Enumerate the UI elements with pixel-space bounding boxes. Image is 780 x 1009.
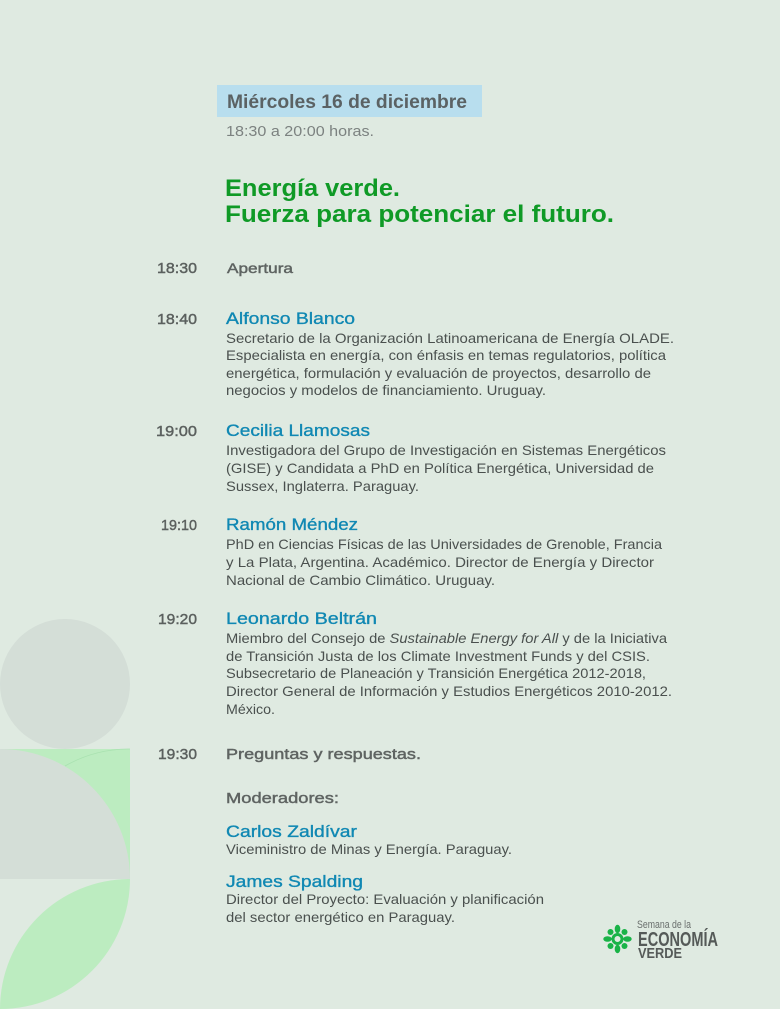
logo: Semana de la Economía Verde: Semana de la	[637, 919, 692, 931]
date banner: Miércoles 16 de diciembre	[227, 92, 467, 113]
item: preguntas y respuestas	[158, 746, 421, 763]
logo: Semana de la Economía Verde: VERDE	[638, 945, 682, 962]
speaker: Alfonso Blanco: negocios y modelos de financiamiento. Uruguay.	[226, 382, 546, 398]
speaker: Alfonso Blanco: Especialista en energía, con énfasis en temas regulatorios, política	[226, 347, 666, 363]
title: Fuerza para potenciar el futuro.	[225, 201, 614, 228]
speaker: Leonardo Beltrán: Subsecretario de Planeación y Transición Energética 2012-2018,	[226, 665, 646, 681]
heading: moderadores: Moderadores:	[226, 790, 339, 807]
speaker: Cecilia Llamosas: (GISE) y Candidata a PhD en Política Energética, Universidad de	[226, 460, 654, 476]
speaker: Leonardo Beltrán: de Transición Justa de los Climate Investment Funds y del CSIS.	[226, 648, 650, 664]
speaker: Ramón Méndez	[161, 515, 662, 588]
speaker: Alfonso Blanco: Secretario de la Organización Latinoamericana de Energía OLADE.	[226, 330, 674, 346]
speaker: Cecilia Llamosas: Sussex, Inglaterra. Paraguay.	[226, 478, 419, 494]
title	[225, 175, 614, 228]
speaker: Cecilia Llamosas: 19:00	[156, 423, 197, 440]
speaker: Cecilia Llamosas: Investigadora del Grupo de Investigación en Sistemas Energéticos	[226, 442, 666, 458]
speaker: Leonardo Beltrán: Leonardo Beltrán	[226, 609, 377, 628]
moderator: James Spalding: Director del Proyecto: Evaluación y planificación	[226, 891, 544, 907]
decorative shapes	[0, 619, 130, 1009]
speaker: Leonardo Beltrán: México.	[226, 701, 275, 717]
logo: Semana de la Economía Verde	[603, 919, 718, 962]
speaker: Leonardo Beltrán	[158, 609, 672, 717]
item: apertura	[157, 260, 293, 277]
item: preguntas y respuestas: Preguntas y respuestas.	[226, 746, 421, 763]
speaker: Leonardo Beltrán: Miembro del Consejo de Sustainable Energy for All y de la Iniciativa	[226, 630, 667, 646]
speaker: Ramón Méndez: Nacional de Cambio Climático. Uruguay.	[226, 572, 495, 588]
item: apertura: 18:30	[157, 260, 197, 277]
speaker: Cecilia Llamosas: Cecilia Llamosas	[226, 421, 370, 440]
speaker: Alfonso Blanco: 18:40	[157, 311, 197, 328]
date banner	[217, 85, 482, 117]
speaker: Ramón Méndez: PhD en Ciencias Físicas de las Universidades de Grenoble, Francia	[226, 536, 662, 552]
schedule hours: 18:30 a 20:00 horas.	[226, 124, 374, 140]
speaker: Cecilia Llamosas	[156, 421, 666, 494]
title: Energía verde.	[225, 175, 400, 202]
moderator: Carlos Zaldívar: Viceministro de Minas y Energía. Paraguay.	[226, 841, 512, 857]
moderator: James Spalding: del sector energético en Paraguay.	[226, 909, 455, 925]
speaker: Leonardo Beltrán: Director General de Información y Estudios Energéticos 2010-2012.	[226, 683, 672, 699]
speaker: Ramón Méndez: 19:10	[161, 517, 197, 534]
moderator: Carlos Zaldívar: Carlos Zaldívar	[226, 822, 357, 841]
speaker: Ramón Méndez: y La Plata, Argentina. Académico. Director de Energía y Director	[226, 554, 654, 570]
moderator: Carlos Zaldívar	[226, 822, 512, 857]
speaker: Alfonso Blanco	[157, 309, 674, 398]
logo: Semana de la Economía Verde: ECONOMÍA	[638, 928, 718, 951]
speaker: Leonardo Beltrán: 19:20	[158, 611, 197, 628]
speaker: Alfonso Blanco: energética, formulación y evaluación de proyectos, desarrollo de	[226, 365, 651, 381]
moderator: James Spalding	[226, 872, 544, 925]
speaker: Alfonso Blanco: Alfonso Blanco	[226, 309, 355, 328]
item: preguntas y respuestas: 19:30	[158, 746, 197, 763]
moderator: James Spalding: James Spalding	[226, 872, 363, 891]
item: apertura: Apertura	[227, 260, 293, 276]
icon: green flower	[603, 925, 632, 953]
speaker: Ramón Méndez: Ramón Méndez	[226, 515, 358, 534]
